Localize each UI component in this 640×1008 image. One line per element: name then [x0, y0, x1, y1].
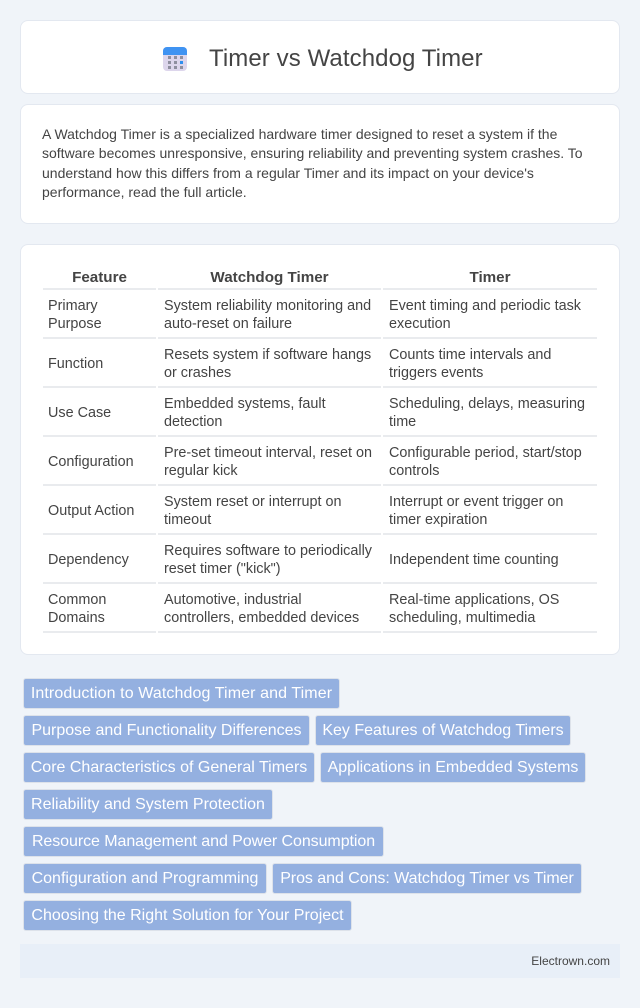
header: Timer: Timer	[469, 269, 511, 286]
row: Configuration: Configuration	[48, 454, 134, 470]
comparison table: Real-time applications, OS	[389, 592, 559, 608]
row: Primary Purpose	[48, 298, 102, 332]
topic tags	[23, 678, 586, 931]
comparison table: or crashes	[164, 365, 231, 381]
comparison table: triggers events	[389, 365, 483, 381]
comparison table: execution	[389, 316, 451, 332]
footer bar	[20, 944, 620, 978]
row: Output Action: Output Action	[48, 503, 134, 519]
row: Common Domains: Domains	[48, 610, 105, 626]
tag: Core Characteristics of General Timers	[31, 759, 307, 776]
title: Timer vs Watchdog Timer	[209, 45, 483, 72]
tag	[23, 863, 267, 894]
tag: Introduction to Watchdog Timer and Timer	[31, 685, 332, 702]
comparison table: timeout	[164, 512, 211, 528]
comparison table: System reset or interrupt on	[164, 494, 342, 510]
tag: Resource Management and Power Consumption	[32, 833, 375, 850]
tag: Applications in Embedded Systems	[328, 759, 578, 776]
icon: calendar	[163, 47, 187, 71]
row: Common Domains: Common	[48, 592, 106, 608]
comparison table: Configurable period, start/stop	[389, 445, 582, 461]
comparison table: auto-reset on failure	[164, 316, 292, 332]
comparison table: controllers, embedded devices	[164, 610, 359, 626]
tag: Key Features of Watchdog Timers	[322, 722, 564, 739]
row: Primary Purpose: Primary	[48, 298, 98, 314]
intro text: performance, read the full article.	[42, 184, 247, 200]
comparison table: scheduling, multimedia	[389, 610, 535, 626]
header: Watchdog Timer: Watchdog Timer	[210, 269, 329, 286]
comparison table: reset timer ("kick")	[164, 561, 281, 577]
tag	[320, 752, 586, 783]
comparison table: detection	[164, 414, 222, 430]
tag: Purpose and Functionality Differences	[31, 722, 302, 739]
intro text: A Watchdog Timer is a specialized hardware timer designed to reset a system if the	[42, 126, 557, 142]
comparison table: Requires software to periodically	[164, 543, 372, 559]
tag	[315, 715, 571, 746]
comparison table: System reliability monitoring and	[164, 298, 371, 314]
comparison table	[43, 269, 597, 633]
tag	[23, 715, 310, 746]
comparison table: Interrupt or event trigger on	[389, 494, 563, 510]
tag: Pros and Cons: Watchdog Timer vs Timer	[280, 870, 574, 887]
row: Use Case: Use Case	[48, 405, 111, 421]
intro panel	[20, 104, 620, 224]
comparison table: Scheduling, delays, measuring	[389, 396, 585, 412]
row: Common Domains	[48, 592, 106, 626]
comparison table: time	[389, 414, 416, 430]
tag: Reliability and System Protection	[31, 796, 265, 813]
comparison table: Resets system if software hangs	[164, 347, 371, 363]
tag	[23, 826, 384, 857]
intro text: software becomes unresponsive, ensuring reliability and preventing system crashes. To	[42, 145, 583, 161]
tag	[23, 678, 340, 709]
comparison table: timer expiration	[389, 512, 487, 528]
comparison table: Independent time counting	[389, 552, 559, 568]
comparison table: Event timing and periodic task	[389, 298, 581, 314]
footer credit: Electrown.com	[531, 954, 610, 968]
row: Primary Purpose: Purpose	[48, 316, 102, 332]
header: Feature: Feature	[72, 269, 127, 286]
row: Function: Function	[48, 356, 103, 372]
comparison table: regular kick	[164, 463, 238, 479]
comparison table: Embedded systems, fault	[164, 396, 326, 412]
tag	[23, 900, 352, 931]
table panel	[20, 244, 620, 655]
comparison table: Pre-set timeout interval, reset on	[164, 445, 372, 461]
tag: Choosing the Right Solution for Your Project	[31, 907, 344, 924]
intro text	[42, 126, 583, 200]
intro text: understand how this differs from a regular Timer and its impact on your device's	[42, 165, 534, 181]
title panel	[20, 20, 620, 94]
tag	[23, 752, 315, 783]
comparison table: controls	[389, 463, 439, 479]
tag	[23, 789, 273, 820]
row: Dependency: Dependency	[48, 552, 129, 568]
comparison table: Automotive, industrial	[164, 592, 302, 608]
tag: Configuration and Programming	[32, 870, 258, 887]
tag	[272, 863, 582, 894]
comparison table: Counts time intervals and	[389, 347, 551, 363]
